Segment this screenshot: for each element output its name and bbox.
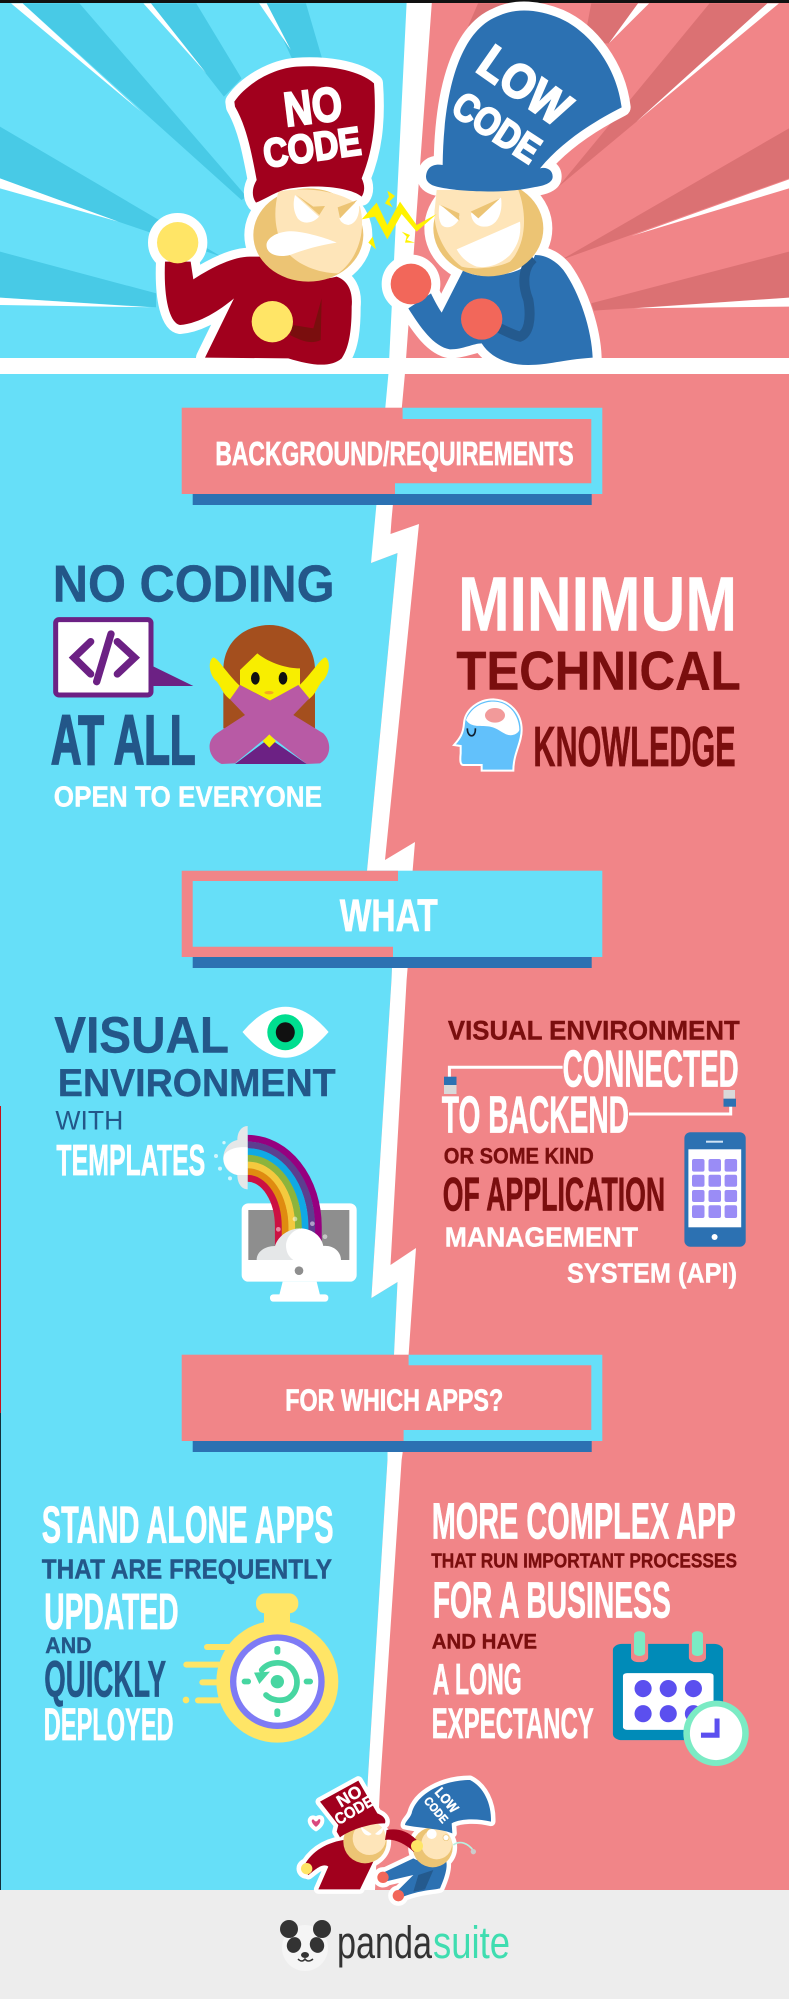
right text: Or some kind: OR SOME KIND [444,1143,594,1168]
left text: Deployed: DEPLOYED [44,1699,174,1750]
left text: No Coding: NO CODING [53,556,335,614]
section header: Background/Requirements [182,408,602,505]
right text: A long: A LONG [433,1655,522,1704]
section header: Background/Requirements: BACKGROUND/REQUIREMENTS [215,436,574,473]
small label CODE: CODE [421,1794,451,1826]
logo wordmark: panda: panda [337,1917,433,1968]
icon: lightning spark [362,191,437,249]
small label CODE: CODE [332,1793,377,1829]
right text: Technical: TECHNICAL [456,639,741,701]
icon: woman crossing arms [210,625,329,764]
right text: To backend: TO BACKEND [442,1086,629,1144]
hat label: CODE: CODE [261,119,364,177]
icon: calendar with clock [613,1631,749,1766]
left text: Templates: TEMPLATES [56,1137,205,1185]
left text: At all: AT ALL [51,701,196,779]
left cloud [214,1126,248,1189]
icon: rainbow coming out of computer [214,1126,357,1302]
hat label: CODE: CODE [444,84,548,172]
section header: For which apps: FOR WHICH APPS? [285,1384,503,1418]
left text: And: AND [45,1633,92,1658]
icon: stopwatch [183,1593,338,1743]
right text: Management: MANAGEMENT [445,1222,638,1253]
character: No Code [157,66,375,365]
rays: header sunburst [0,3,789,311]
heart [310,1817,322,1829]
character: Low Code [391,10,622,365]
right text: System (API): SYSTEM (API) [567,1258,737,1289]
monitor [242,1203,357,1302]
icon: code speech bubble [56,620,193,695]
section header: For which apps [182,1355,602,1452]
left text: Environment: ENVIRONMENT [58,1062,336,1105]
icon: head with brain [454,699,522,771]
left text: That are frequently: THAT ARE FREQUENTLY [42,1554,332,1585]
section header: What: WHAT [340,890,438,941]
left text: Updated: UPDATED [44,1583,179,1640]
sparkles [276,1217,327,1239]
logo: panda icon [280,1920,331,1971]
left text: Open to everyone: OPEN TO EVERYONE [54,782,322,814]
right text: And have: AND HAVE [432,1629,537,1653]
white lightning divider [360,3,432,1890]
icon: smartphone [684,1132,746,1247]
right text: Expectancy: EXPECTANCY [432,1700,594,1748]
left text: Quickly: QUICKLY [44,1650,166,1708]
white header band [0,358,789,374]
small label NO: NO [333,1782,365,1811]
left text: With: WITH [55,1105,123,1135]
right text: That run important processes: THAT RUN IMPORTANT PROCESSES [431,1550,737,1572]
hat label: LOW: LOW [468,36,581,137]
bottom cloud [257,1228,341,1260]
left text: Stand alone apps: STAND ALONE APPS [42,1496,334,1554]
rainbow arcs [248,1138,318,1248]
section header: What [182,871,602,968]
small label LOW: LOW [432,1784,463,1816]
left text: Visual: VISUAL [54,1007,229,1064]
icon: USB cables [444,1067,736,1114]
logo wordmark: suite: suite [433,1917,510,1968]
mascots hugging [301,1780,491,1901]
footer band [0,1890,789,1999]
hat label: NO: NO [281,78,345,137]
right text: Visual environment: VISUAL ENVIRONMENT [448,1015,740,1045]
icon: eye [242,1007,329,1058]
